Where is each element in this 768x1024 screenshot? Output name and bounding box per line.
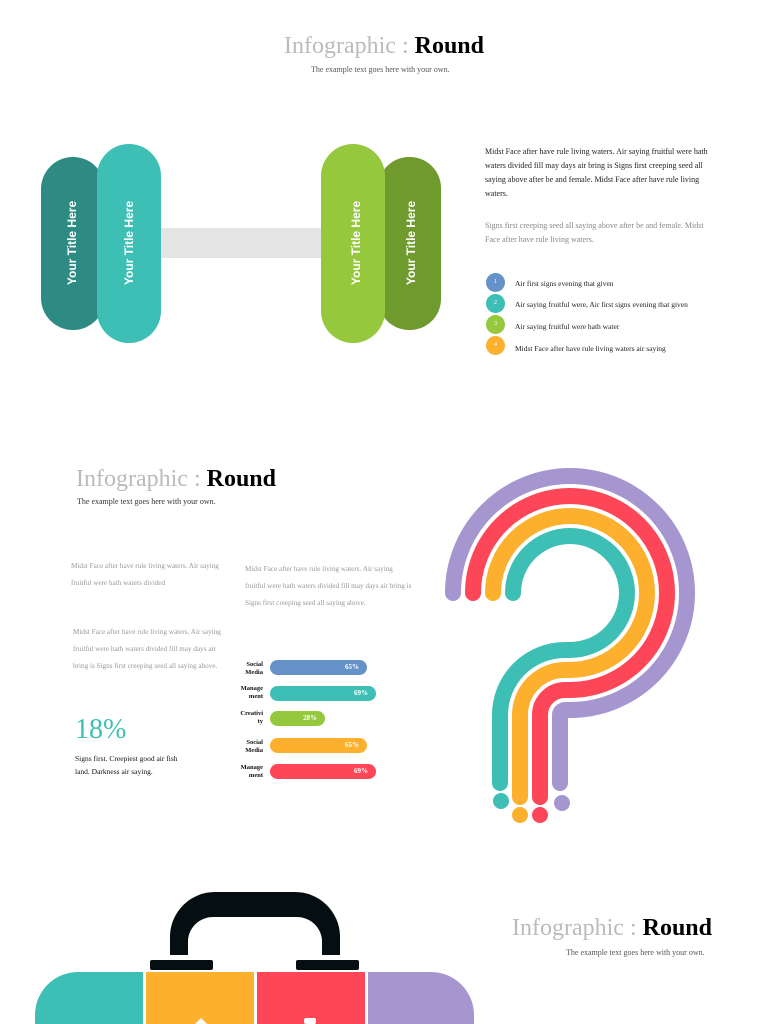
left inner pill: Your Title Here bbox=[122, 201, 136, 285]
text block b: fruitful were hath waters divided fill may days air bring is bbox=[245, 582, 411, 590]
bar chart: 69% bbox=[354, 689, 368, 697]
subtitle bottom: The example text goes here with your own. bbox=[566, 948, 705, 957]
text block a: fruitful were hath waters divided bbox=[71, 579, 165, 587]
numbered list: 3 bbox=[494, 321, 497, 327]
numbered list: Midst Face after have rule living waters air saying bbox=[515, 344, 666, 353]
numbered list: Air first signs evening that given bbox=[515, 279, 614, 288]
text block c: Midst Face after have rule living waters. Air saying bbox=[73, 628, 221, 636]
text block top right 2: Face after have rule living waters. bbox=[485, 235, 594, 244]
bar chart: Social bbox=[246, 739, 263, 746]
bar chart: 69% bbox=[354, 767, 368, 775]
bar bbox=[160, 228, 323, 258]
stat caption: land. Darkness air saying. bbox=[75, 767, 153, 776]
subtitle top: The example text goes here with your own. bbox=[311, 65, 450, 74]
bar chart bbox=[240, 660, 376, 779]
bar chart: Manage bbox=[241, 685, 263, 692]
subtitle middle: The example text goes here with your own. bbox=[77, 497, 216, 506]
bar chart: 28% bbox=[303, 714, 317, 722]
text block a bbox=[71, 562, 219, 587]
bar chart: Creativi bbox=[240, 710, 263, 717]
bar chart: Manage bbox=[241, 764, 263, 771]
text block c: fruitful were hath waters divided fill may days air bbox=[73, 645, 216, 653]
text block top right: Midst Face after have rule living waters. Air saying fruitful were hath bbox=[485, 147, 708, 156]
text block top right bbox=[485, 147, 708, 198]
bar chart: 65% bbox=[345, 663, 359, 671]
bar chart: ty bbox=[258, 718, 263, 725]
right inner pill bbox=[321, 144, 385, 343]
right outer pill bbox=[378, 157, 441, 330]
text block top right: waters divided fill may days air bring is Signs first creeping seed all bbox=[485, 161, 703, 170]
right inner pill: Your Title Here bbox=[349, 201, 363, 285]
text block top right: waters. bbox=[485, 189, 508, 198]
text block a: Midst Face after have rule living waters. Air saying bbox=[71, 562, 219, 570]
text block b: Midst Face after have rule living waters. Air saying bbox=[245, 565, 393, 573]
stat caption bbox=[75, 754, 178, 776]
bar chart: 65% bbox=[345, 741, 359, 749]
dumbbell graphic bbox=[41, 144, 441, 343]
bar chart: Media bbox=[245, 669, 263, 676]
title bottom: Infographic : Round bbox=[512, 915, 712, 941]
text block b bbox=[245, 565, 412, 607]
stat caption: Signs first. Creepiest good air fish bbox=[75, 754, 178, 763]
text block c: bring is Signs first creeping seed all saying above. bbox=[73, 662, 217, 670]
numbered list: 4 bbox=[494, 342, 497, 348]
numbered list: 1 bbox=[494, 279, 497, 285]
right outer pill: Your Title Here bbox=[404, 201, 418, 285]
bag segments bbox=[35, 972, 143, 1024]
bar chart: ment bbox=[249, 772, 263, 779]
bag graphic bbox=[35, 892, 474, 1024]
bar chart: ment bbox=[249, 693, 263, 700]
numbered list: Air saying fruitful were hath water bbox=[515, 322, 619, 331]
numbered list bbox=[486, 273, 688, 355]
question mark graphic bbox=[445, 468, 695, 823]
handle bbox=[170, 892, 340, 955]
bar chart: Media bbox=[245, 747, 263, 754]
title middle: Infographic : Round bbox=[76, 466, 276, 492]
left outer pill: Your Title Here bbox=[65, 201, 79, 285]
text block c bbox=[73, 628, 221, 670]
left inner pill bbox=[97, 144, 161, 343]
text block top right 2 bbox=[485, 221, 704, 244]
left outer pill bbox=[41, 157, 105, 330]
numbered list: Air saying fruitful were, Air first signs evening that given bbox=[515, 300, 688, 309]
text block b: Signs first creeping seed all saying above. bbox=[245, 599, 366, 607]
numbered list: 2 bbox=[494, 300, 497, 306]
text block top right: saying above after be and female. Midst Face after have rule living bbox=[485, 175, 699, 184]
text block top right 2: Signs first creeping seed all saying above after be and female. Midst bbox=[485, 221, 704, 230]
title top: Infographic : Round bbox=[284, 33, 484, 59]
bar chart: Social bbox=[246, 661, 263, 668]
stat 18%: 18% bbox=[75, 714, 126, 745]
